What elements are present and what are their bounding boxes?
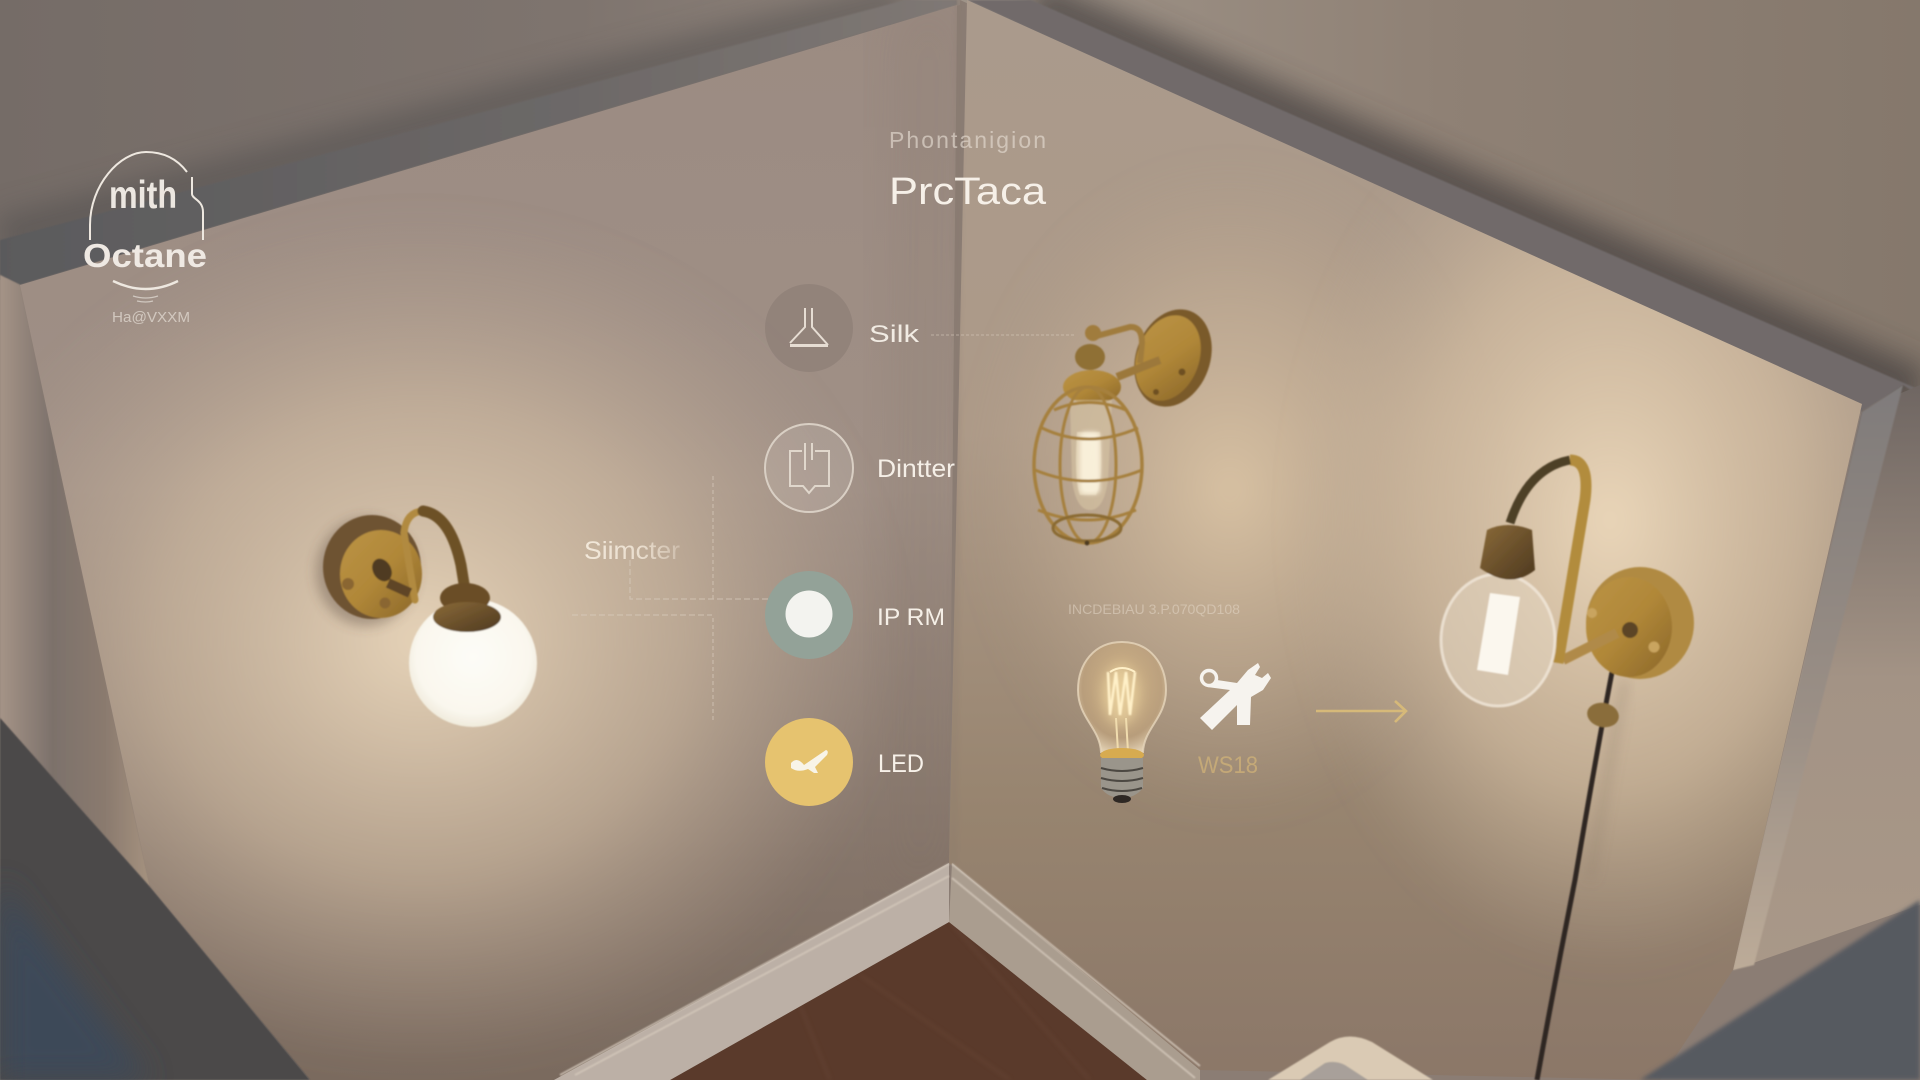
logo — [83, 152, 207, 326]
title block: PrcTaca — [889, 171, 1047, 213]
list item: Silk: Silk — [869, 321, 920, 348]
title block: Phontanigion — [889, 127, 1046, 153]
logo: Octane — [83, 237, 207, 274]
caption above bulb: INCDEBIAU 3.P.070QD108 — [1068, 601, 1240, 617]
list item: IP RM — [765, 571, 945, 659]
list item: Silk — [765, 284, 1075, 372]
list item: Dintter — [765, 424, 955, 512]
connector lines: Siimcter — [572, 476, 768, 722]
cage lamp upper centre — [1034, 298, 1225, 546]
title block — [889, 127, 1047, 213]
right lamp: clear globe with cord — [1440, 460, 1694, 1080]
icon: filament bulb — [1078, 642, 1166, 803]
list item: Dintter: Dintter — [877, 455, 955, 483]
logo: mith — [109, 174, 177, 217]
list item: LED — [765, 718, 924, 806]
chair back in foreground — [1268, 1036, 1433, 1080]
list item: LED: LED — [878, 750, 924, 778]
label: Siimcter: Siimcter — [584, 537, 680, 565]
left lamp: opal globe sconce — [316, 511, 537, 727]
arrow — [1316, 701, 1406, 722]
label: WS18: WS18 — [1198, 752, 1258, 779]
logo: Ha@VXXM — [112, 309, 190, 326]
list item: IP RM: IP RM — [877, 604, 945, 631]
icon: wrench and tools — [1200, 663, 1271, 730]
